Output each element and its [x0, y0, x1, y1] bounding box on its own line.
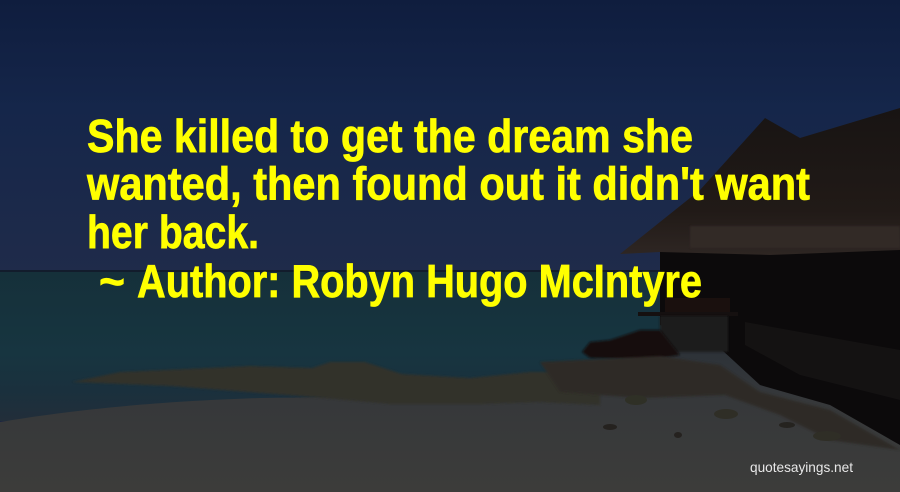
watermark: quotesayings.net [750, 459, 853, 475]
quote line 2: wanted, then found out it didn't want [86, 158, 810, 210]
horizon line [0, 270, 660, 272]
foreground pebbles [540, 356, 900, 450]
hut [582, 108, 900, 445]
hut deck red band [665, 298, 730, 312]
pebble band [540, 356, 900, 450]
hut deck lower walkway [745, 322, 900, 400]
quote text [86, 110, 810, 307]
author line: Author: Robyn Hugo McIntyre [137, 255, 702, 307]
quote line 3: her back. [87, 206, 259, 258]
shore rocks [582, 330, 680, 360]
tilde: ~ [99, 255, 125, 307]
hut wall and dark ground [660, 245, 900, 445]
quote line 1: She killed to get the dream she [87, 110, 693, 162]
small stones [603, 424, 617, 430]
thatched roof [620, 108, 900, 255]
background: sand beach [0, 340, 900, 492]
rock reef [72, 362, 600, 405]
hut deck ledge [638, 312, 738, 316]
hut stone base [660, 316, 728, 352]
background: night sky [0, 0, 900, 272]
roof fringe [690, 226, 900, 248]
background: sea [0, 271, 900, 421]
